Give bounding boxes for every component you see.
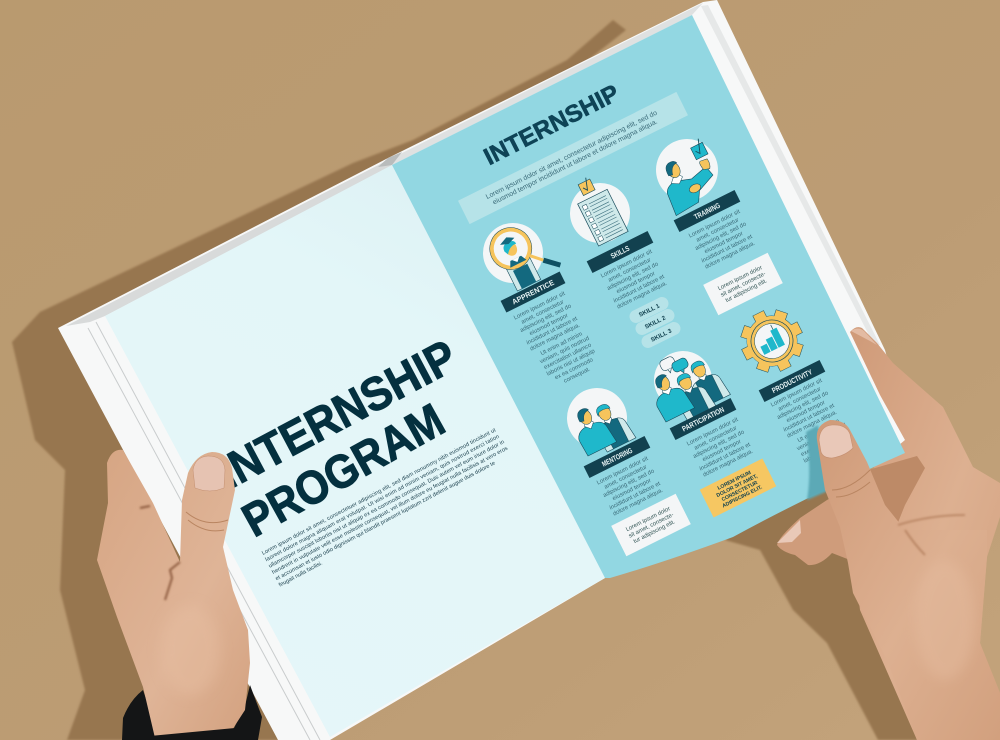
subtitle band: eiusmod tempor incididunt ut labore et dolore magna aliqua. — [492, 118, 659, 206]
label: apprentice: APPRENTICE — [510, 278, 556, 306]
label: apprentice — [501, 271, 565, 313]
wrist highlight — [160, 605, 220, 695]
text: productivity description: Lorem ipsum dolor sit — [770, 378, 823, 408]
thumb nail — [819, 425, 853, 458]
page: left cover page — [105, 165, 605, 737]
callout: training white box: sit amet, consecte- — [720, 271, 767, 299]
right page heading: INTERNSHIP — [480, 80, 624, 171]
icon: training woman — [645, 128, 731, 216]
callout: training white box — [703, 253, 783, 315]
text: skills description — [600, 249, 669, 311]
text: productivity second paragraph — [793, 416, 857, 471]
text: skills description: dolore magna aliqua. — [616, 280, 669, 311]
text: training description — [688, 209, 757, 271]
pill: skill 1: SKILL 1 — [638, 303, 661, 319]
text: productivity second paragraph: laboris nisi ut aliquip — [803, 435, 854, 465]
right hand: back fingers — [777, 470, 880, 565]
text: apprentice description: adipiscing elit, sed do — [519, 303, 573, 334]
text: apprentice second paragraph: Ut enim ad minim — [540, 331, 584, 357]
text: apprentice description: eiusmod tempor — [529, 313, 569, 337]
shadow of book on the table — [12, 20, 626, 740]
icon: mentoring pair — [557, 378, 639, 463]
text: productivity second paragraph: exercitation ullamco — [800, 429, 850, 458]
text: participation description: eiusmod tempor — [702, 439, 742, 463]
label: participation: PARTICIPATION — [680, 405, 726, 433]
right hand: index finger and palm — [850, 327, 1000, 740]
text: mentoring description — [596, 456, 665, 518]
left page-edge lines — [88, 322, 320, 740]
text: skills description: incididunt ut labore et — [613, 274, 666, 304]
label: productivity: PRODUCTIVITY — [770, 367, 814, 395]
icon: productivity gear — [730, 299, 814, 383]
shadow of right hand — [725, 470, 950, 740]
text: apprentice description: amet, consectetur — [520, 299, 565, 326]
label: mentoring — [584, 436, 650, 478]
right hand: thumb — [817, 420, 1000, 740]
top gray edge left — [66, 160, 392, 326]
text: productivity description: dolore magna aliqua. — [786, 409, 839, 440]
text: productivity description: adipiscing elit, sed do — [776, 390, 830, 421]
left page text — [209, 329, 465, 547]
palm crease — [898, 515, 965, 555]
callout: mentoring white box: Lorem ipsum dolor — [625, 506, 672, 533]
text: training description: adipiscing elit, sed do — [694, 221, 748, 252]
text: mentoring description: Lorem ipsum dolor sit — [596, 456, 649, 486]
text: apprentice description: incididunt ut labore et — [526, 316, 579, 346]
text: training description: dolore magna aliqua. — [704, 240, 757, 271]
text: apprentice description: Lorem ipsum dolor sit — [513, 291, 566, 321]
callout: yellow box: CONSECTETUR — [721, 480, 759, 503]
text: apprentice second paragraph: exercitation ullamco — [543, 342, 593, 371]
white speech bubble — [658, 355, 679, 376]
icon: apprentice magnifier — [473, 210, 562, 299]
callout: training white box: Lorem ipsum dolor — [717, 265, 764, 292]
text: mentoring description: incididunt ut labore et — [609, 481, 662, 511]
label: training: TRAINING — [693, 201, 722, 221]
text: participation description: Lorem ipsum dolor sit — [686, 417, 739, 447]
label: training — [674, 190, 740, 232]
right gray edge stripe — [701, 5, 880, 345]
label: participation — [670, 398, 736, 440]
text: skills description: Lorem ipsum dolor sit — [600, 249, 653, 279]
left hand — [97, 450, 250, 738]
left page paragraph: Lorem ipsum dolor sit amet, consectetuer adipiscing elit, sed diam nonummy nibh euismod tincidunt ut — [261, 427, 497, 557]
text: apprentice second paragraph: veniam, quis nostrud — [539, 336, 590, 365]
label: productivity — [759, 360, 825, 402]
icon: skills checklist — [556, 166, 640, 253]
thumb knuckle crease — [832, 470, 870, 497]
label: skills — [587, 231, 653, 273]
watch strap bottom — [150, 728, 245, 740]
callout: training white box: tur adipiscing elit. — [725, 278, 769, 304]
thumb nail — [193, 456, 225, 491]
text: productivity second paragraph: veniam, quis nostrud — [796, 423, 847, 452]
subtitle band: Lorem ipsum dolor sit amet, consectetur adipiscing elit, sed do — [485, 110, 659, 201]
index fingernail — [851, 328, 877, 345]
text: participation description: adipiscing elit, sed do — [692, 429, 746, 460]
text: apprentice description: dolore magna aliqua. — [529, 322, 582, 353]
text: apprentice second paragraph: laboris nisi ut aliquip — [546, 348, 597, 378]
left page paragraph: et accumsan et iusto odio dignissim qui blandit praesent luptatum zzril delenit augue duis dolore te — [275, 460, 496, 582]
text: training description: eiusmod tempor — [704, 231, 744, 255]
palm highlight — [915, 560, 975, 680]
left page paragraph: laoreet dolore magna aliquam erat volutpat. Ut wisi enim ad minim veniam, quis nostrud exerci tation — [265, 434, 500, 563]
label: mentoring: MENTORING — [600, 446, 634, 469]
thumb crease — [186, 512, 228, 531]
callout: yellow box — [700, 459, 776, 517]
text: apprentice second paragraph: ex ea commodo — [554, 357, 595, 381]
text: participation description: amet, consectetur — [693, 425, 738, 452]
shaded gap between fingers — [868, 456, 925, 530]
callout: mentoring white box — [611, 494, 691, 556]
text: participation description — [686, 417, 755, 479]
callout: yellow box: ADIPISCING ELIT. — [722, 484, 764, 509]
back fingernail — [777, 520, 801, 543]
web crease — [140, 506, 180, 600]
callout: mentoring white box: tur adipiscing elit. — [633, 519, 677, 545]
teal speech bubble — [670, 357, 691, 376]
callout: yellow box: LOREM IPSUM — [717, 470, 752, 492]
text: apprentice second paragraph — [536, 329, 603, 390]
text: skills description: adipiscing elit, sed do — [606, 261, 660, 292]
text: productivity second paragraph: ex ea commodo — [811, 444, 852, 468]
pill: skill 3: SKILL 3 — [650, 328, 673, 344]
text: apprentice second paragraph: consequat. — [563, 366, 592, 385]
thumb shadow on right page — [806, 425, 830, 500]
left page paragraph: hendrerit in vulputate velit esse molestie consequat, vel illum dolore eu feugiat nulla facilisis at vero eros — [271, 446, 509, 576]
text: productivity description: incididunt ut labore et — [783, 403, 836, 433]
text: participation description: incididunt ut labore et — [699, 442, 752, 472]
text: productivity description: amet, consectetur — [777, 386, 822, 413]
spine crease — [378, 152, 402, 167]
callout: mentoring white box: sit amet, consecte- — [628, 512, 675, 540]
top gray edge right — [392, 3, 703, 165]
skill pills — [627, 295, 683, 350]
text: productivity description: eiusmod tempor — [786, 400, 826, 424]
text: mentoring description: amet, consectetur — [603, 464, 648, 491]
text: mentoring description: adipiscing elit, sed do — [602, 468, 656, 499]
title: INTERNSHIP PROGRAM: INTERNSHIP — [209, 329, 465, 499]
text: training description: Lorem ipsum dolor sit — [688, 209, 741, 239]
text: training description: incididunt ut labore et — [701, 234, 754, 264]
text: skills description: amet, consectetur — [607, 257, 652, 284]
label: skills: SKILLS — [609, 244, 631, 261]
text: mentoring description: eiusmod tempor — [612, 478, 652, 502]
callout: yellow box: DOLOR SIT AMET, — [716, 473, 759, 499]
text: productivity description — [770, 378, 839, 440]
page: right teal page — [392, 15, 905, 578]
watch strap — [122, 685, 262, 740]
text: participation description: dolore magna aliqua. — [702, 448, 755, 479]
left page paragraph: feugait nulla facilisi. — [278, 560, 324, 589]
text: training description: amet, consectetur — [695, 217, 740, 244]
text: apprentice description — [513, 291, 582, 353]
left page paragraph: ullamcorper suscipit lobortis nisl ut aliquip ex ea commodo consequat. Duis autem vel eum iriure dolor in — [268, 439, 506, 569]
text: mentoring description: dolore magna aliqua. — [612, 487, 665, 518]
subtitle band — [458, 92, 688, 224]
text: skills description: eiusmod tempor — [616, 271, 656, 295]
pill: skill 2: SKILL 2 — [644, 315, 667, 331]
text: productivity second paragraph: Ut enim ad minim — [797, 418, 841, 444]
left page text: PROGRAM — [233, 393, 453, 547]
icon: participation group — [639, 338, 733, 431]
